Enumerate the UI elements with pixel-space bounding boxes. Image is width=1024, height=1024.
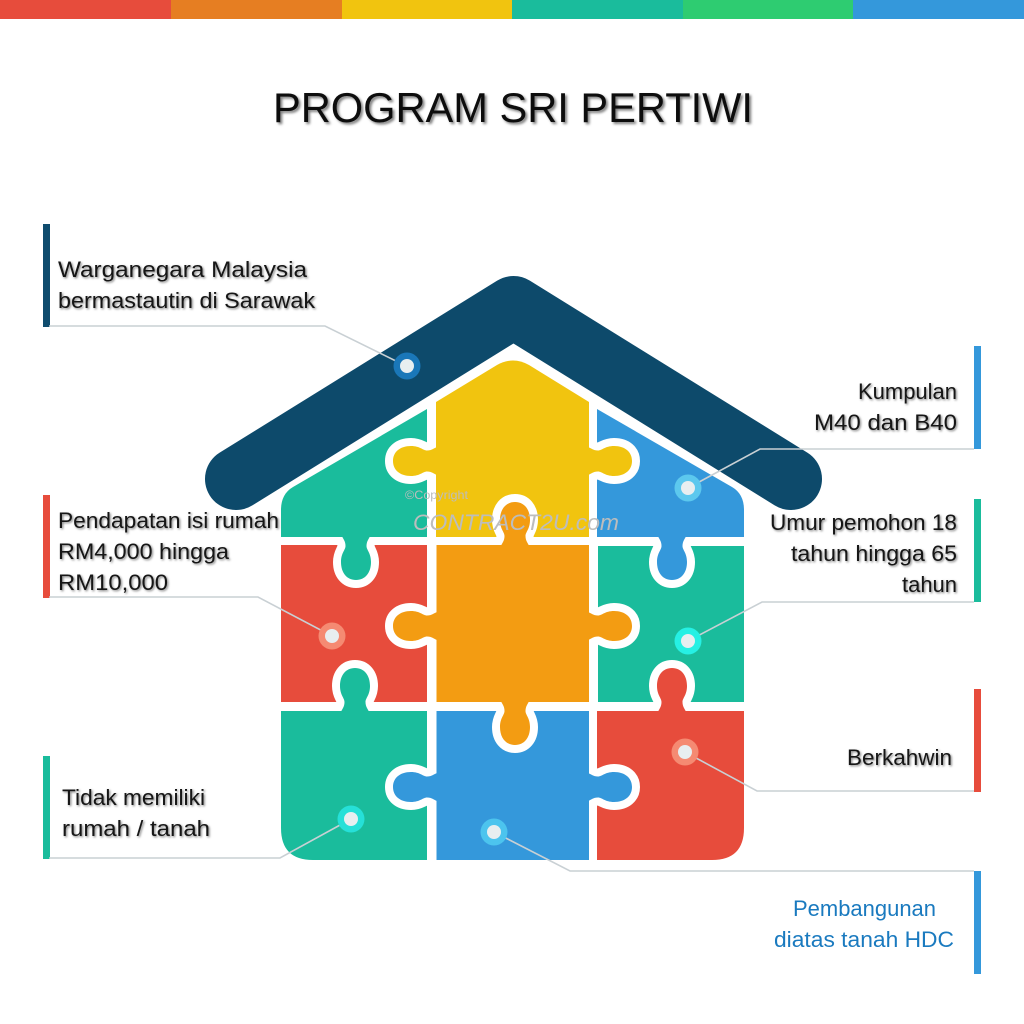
piece: green right xyxy=(598,546,744,702)
callout: no property xyxy=(43,756,364,859)
callout: citizenship xyxy=(43,224,420,380)
callout: married: Berkahwin xyxy=(847,745,952,770)
piece: red bottom right xyxy=(597,668,744,860)
piece: teal bottom left xyxy=(281,668,427,860)
callout: no property: Tidak memiliki xyxy=(62,785,205,810)
piece: yellow top centre xyxy=(393,360,632,537)
callout: age: Umur pemohon 18 xyxy=(770,510,957,535)
callout: income group xyxy=(674,346,981,502)
watermark: ©Copyright xyxy=(405,488,469,502)
callout: income group: M40 dan B40 xyxy=(814,410,957,435)
callout: age xyxy=(674,499,981,654)
piece: green top left xyxy=(281,409,427,580)
piece: blue top right xyxy=(597,409,744,580)
callout: income: RM10,000 xyxy=(58,570,168,595)
watermark xyxy=(405,488,619,535)
title: PROGRAM SRI PERTIWI xyxy=(273,84,753,131)
puzzle house xyxy=(281,360,744,860)
callout: age: tahun hingga 65 xyxy=(791,541,957,566)
callout: married xyxy=(672,689,981,792)
callout: citizenship: Warganegara Malaysia xyxy=(58,257,308,282)
piece: red left xyxy=(281,545,427,702)
callout: age: tahun xyxy=(902,572,957,597)
piece: orange centre xyxy=(393,502,632,745)
callout: income: Pendapatan isi rumah xyxy=(58,508,279,533)
callout: citizenship: bermastautin di Sarawak xyxy=(58,288,316,313)
callout: no property: rumah / tanah xyxy=(62,816,210,841)
callout: income: RM4,000 hingga xyxy=(58,539,230,564)
top colour bar xyxy=(0,0,1024,19)
watermark: CONTRACT2U.com xyxy=(413,510,619,535)
callout: income group: Kumpulan xyxy=(858,379,957,404)
callout: HDC land xyxy=(480,818,981,974)
house roof xyxy=(236,307,791,479)
callout: HDC land: Pembangunan xyxy=(793,896,936,921)
callout: income xyxy=(43,495,346,650)
piece: blue bottom centre xyxy=(393,711,632,860)
callout: HDC land: diatas tanah HDC xyxy=(774,927,954,952)
